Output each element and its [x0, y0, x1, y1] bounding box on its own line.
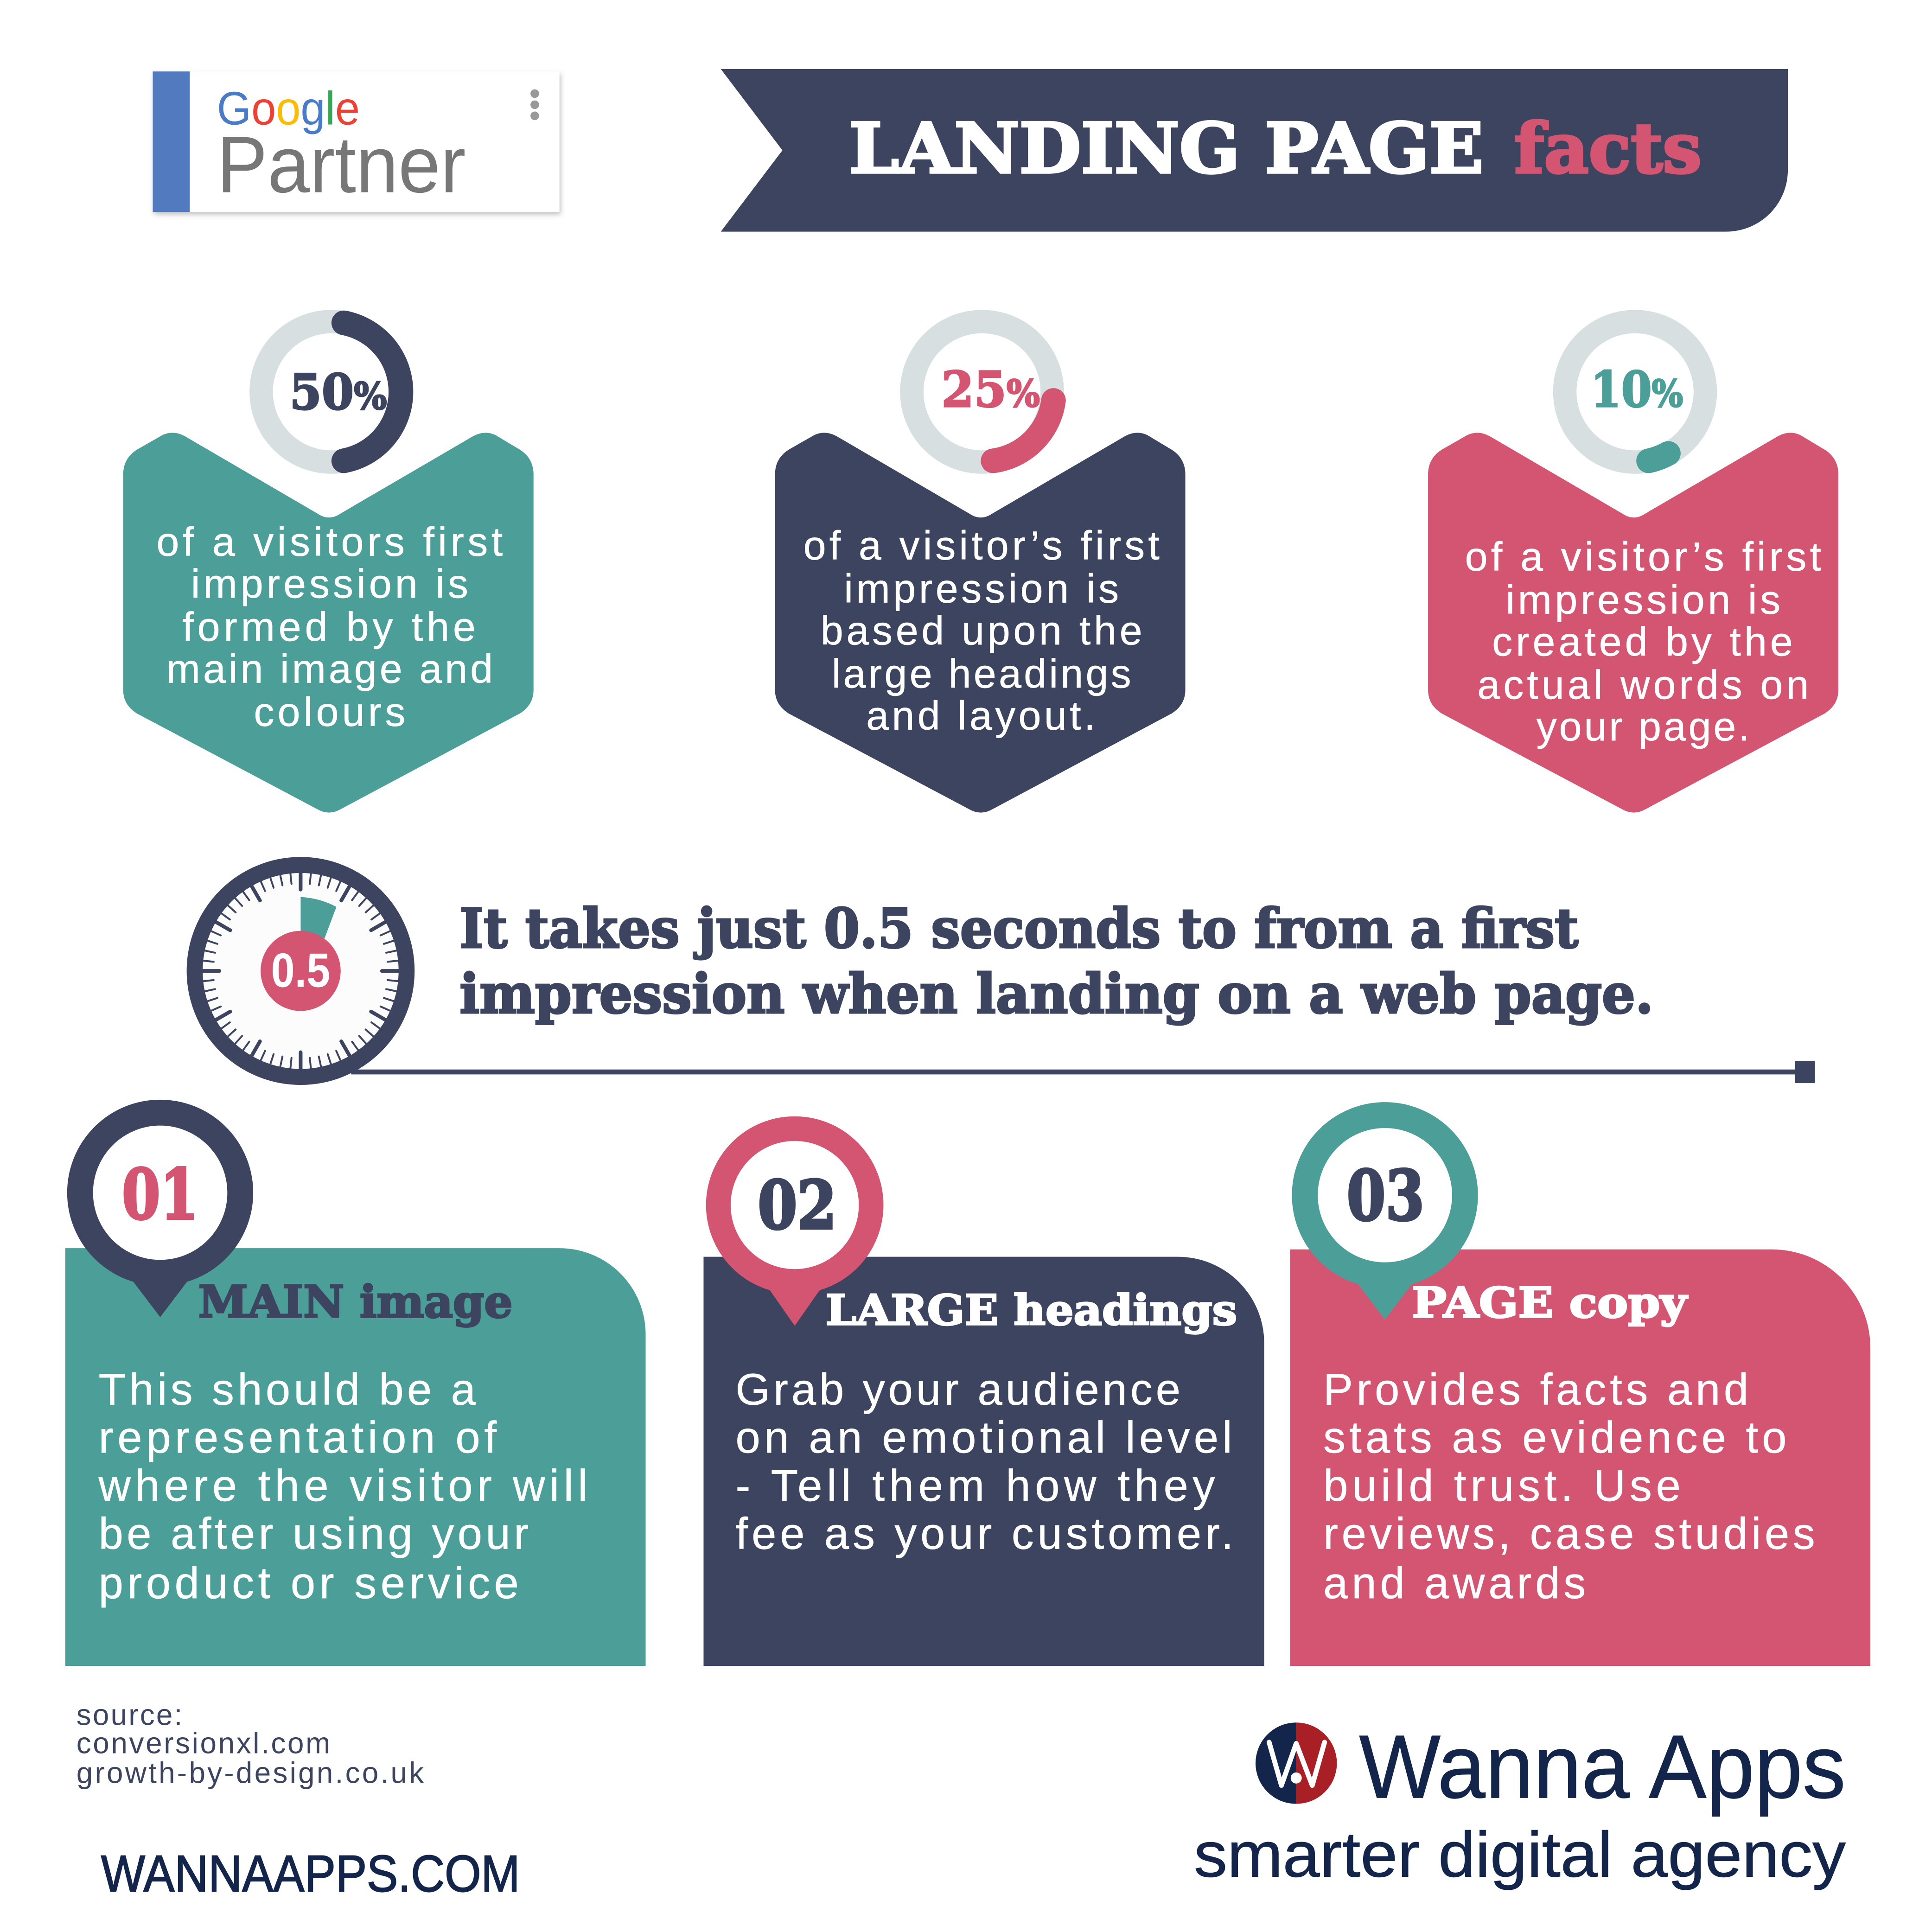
pin 02: [718, 1129, 871, 1326]
source note: source:: [77, 1698, 182, 1732]
pin 03: 03: [1347, 1155, 1424, 1237]
fact text 10: your page.: [1537, 704, 1750, 749]
heading: page copy: PAGE copy: [1412, 1278, 1688, 1327]
fact text 10: actual words on: [1477, 662, 1809, 708]
fact text 10: of a visitor’s first: [1465, 534, 1821, 579]
donut: 50%: [261, 322, 402, 462]
pin 01: [80, 1113, 240, 1317]
body text: page copy: reviews, case studies: [1323, 1509, 1815, 1559]
fact text 25: impression is: [844, 566, 1119, 612]
website url: WANNAAPPS.COM: [101, 1844, 520, 1902]
fact text 25: based upon the: [821, 608, 1142, 653]
icon: stopwatch: [195, 865, 407, 1077]
body text: main image: product or service: [99, 1558, 519, 1608]
donut: 25%: [912, 322, 1053, 462]
badge: Google Partner: Partner: [217, 120, 466, 210]
heading: main image: MAIN image: [198, 1275, 513, 1328]
source note: growth-by-design.co.uk: [77, 1756, 424, 1789]
panel: 50 percent fact: [123, 322, 534, 813]
body text: main image: where the visitor will: [98, 1461, 588, 1511]
body text: page copy: and awards: [1323, 1558, 1586, 1608]
badge: Google Partner: Google: [217, 83, 360, 134]
donut: 25%: 25%: [941, 361, 1040, 419]
body text: large headings: [736, 1365, 1233, 1559]
fact text 10: [1465, 534, 1821, 749]
body text: main image: [98, 1365, 588, 1608]
fact text 50: colours: [254, 689, 405, 734]
icon: stopwatch: 0.5: [271, 944, 330, 997]
title banner: facts: [1514, 108, 1702, 189]
panel: page copy: [1290, 1115, 1870, 1666]
fact text 25: large headings: [832, 651, 1131, 696]
timeline rule: [351, 1061, 1815, 1083]
panel: main image: [65, 1113, 646, 1666]
fact text 50: main image and: [166, 646, 493, 691]
body text: large headings: - Tell them how they: [736, 1461, 1215, 1511]
fact text 50: [157, 519, 503, 734]
fact text 25: [803, 523, 1160, 738]
body text: page copy: stats as evidence to: [1323, 1413, 1786, 1462]
headline statement: It takes just 0.5 seconds to from a first: [459, 897, 1578, 961]
pin 01: 01: [122, 1154, 198, 1235]
body text: main image: be after using your: [99, 1509, 529, 1559]
body text: large headings: on an emotional level: [736, 1413, 1232, 1462]
fact text 50: of a visitors first: [157, 519, 503, 565]
heading: large headings: LARGE headings: [826, 1286, 1237, 1335]
title banner: [721, 69, 1788, 232]
fact text 10: impression is: [1505, 577, 1780, 622]
source note: [77, 1698, 424, 1789]
hexagon shape teal: [123, 433, 534, 813]
fact text 25: and layout.: [866, 693, 1096, 738]
headline statement: [459, 897, 1653, 1026]
title banner: LANDING PAGE: [849, 108, 1484, 189]
body text: page copy: [1323, 1365, 1815, 1608]
icon: Wanna Apps logo mark: [1256, 1722, 1337, 1804]
fact text 50: formed by the: [182, 604, 476, 650]
body text: main image: representation of: [99, 1413, 497, 1462]
panel: 25 percent fact: [775, 322, 1186, 813]
body text: page copy: build trust. Use: [1323, 1461, 1681, 1511]
fact text 10: created by the: [1492, 619, 1793, 664]
brand tagline: smarter digital agency: [1194, 1819, 1846, 1890]
panel: large headings: [703, 1129, 1264, 1666]
body text: page copy: Provides facts and: [1323, 1365, 1748, 1415]
body text: large headings: fee as your customer.: [736, 1509, 1233, 1559]
donut: 10%: 10%: [1591, 361, 1683, 419]
pin 03: [1305, 1115, 1465, 1320]
source note: conversionxl.com: [77, 1727, 330, 1760]
pin 02: 02: [758, 1166, 836, 1244]
hexagon shape pink: [1428, 433, 1838, 813]
headline statement: impression when landing on a web page.: [459, 962, 1653, 1026]
hexagon shape navy: [775, 433, 1186, 813]
fact text 50: impression is: [191, 561, 468, 606]
fact text 25: of a visitor’s first: [803, 523, 1160, 568]
badge: Google Partner: [153, 71, 560, 212]
donut: 10%: [1565, 322, 1705, 462]
panel: 10 percent fact: [1428, 322, 1838, 813]
donut: 50%: 50%: [290, 363, 387, 421]
body text: large headings: Grab your audience: [736, 1365, 1180, 1415]
body text: main image: This should be a: [99, 1365, 476, 1415]
brand name: Wanna Apps: [1359, 1716, 1846, 1817]
